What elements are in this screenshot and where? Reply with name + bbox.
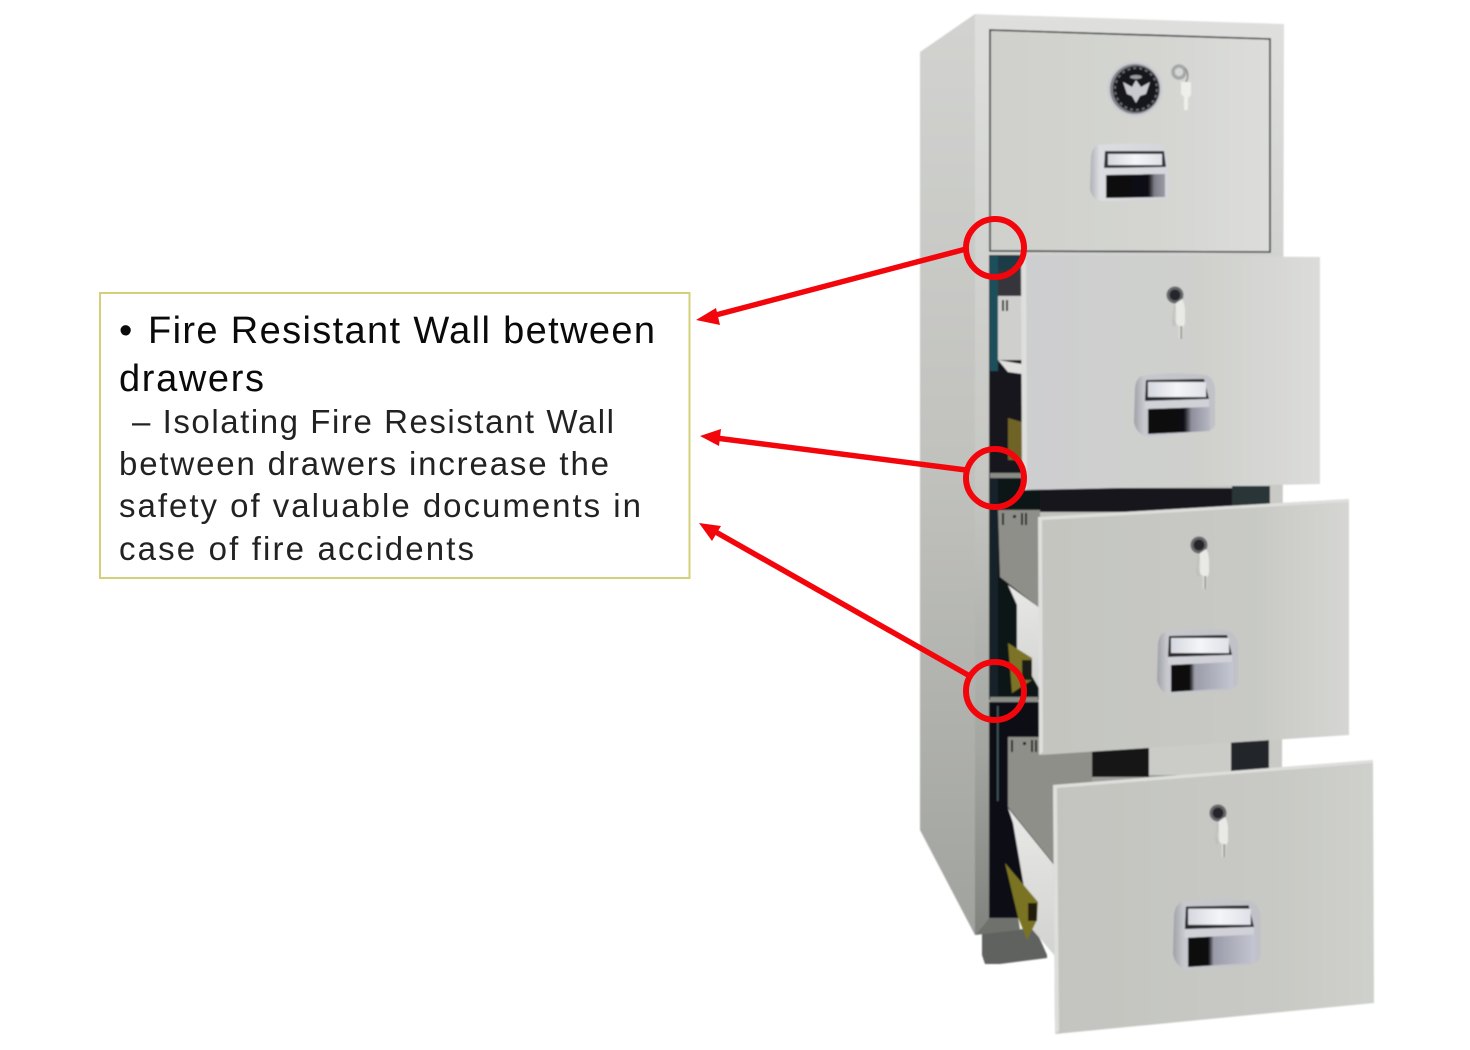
arrow: lower circle to callout [699, 523, 968, 675]
fourth drawer handle [1173, 899, 1260, 970]
icon: key in top lock [1173, 66, 1191, 110]
strip behind third drawer bottom [1092, 735, 1282, 777]
dark band behind second drawer [1024, 486, 1282, 516]
description text: case of fire accidents [119, 530, 474, 567]
heading: drawers [119, 358, 264, 400]
second drawer handle [1134, 373, 1215, 437]
third drawer lock and key [1190, 536, 1209, 589]
top drawer front [990, 30, 1270, 252]
second drawer front [1021, 255, 1320, 490]
interior behind second drawer [989, 255, 1027, 500]
description text: between drawers increase the [119, 445, 609, 482]
description text: safety of valuable documents in [119, 487, 641, 524]
safe cabinet [920, 14, 1374, 1034]
fourth drawer front [1053, 760, 1374, 1034]
circle: lower wall highlight [966, 662, 1024, 720]
top drawer handle [1090, 143, 1170, 201]
cabinet side panel [920, 14, 975, 935]
circle: top wall highlight [966, 219, 1024, 277]
fourth drawer lock and key [1210, 804, 1228, 857]
cabinet base foot [982, 928, 1047, 964]
fourth drawer opening and rail [989, 702, 1092, 956]
second drawer lock and key [1166, 286, 1185, 339]
icon: combination dial [1108, 62, 1162, 116]
callout box [100, 293, 690, 578]
heading [119, 310, 655, 400]
heading: • [119, 310, 132, 352]
arrow: middle circle to callout [700, 429, 966, 470]
third drawer handle [1157, 629, 1238, 695]
cabinet front frame [975, 14, 1284, 935]
heading: Fire Resistant Wall between [148, 310, 655, 352]
description text: – Isolating Fire Resistant Wall [132, 403, 614, 440]
circle: middle wall highlight [966, 449, 1024, 507]
description text [119, 403, 641, 567]
cabinet bottom sill [975, 916, 1020, 935]
third drawer opening and rail [989, 478, 1040, 702]
third drawer front [1038, 499, 1349, 755]
arrow: top circle to callout [696, 249, 966, 325]
